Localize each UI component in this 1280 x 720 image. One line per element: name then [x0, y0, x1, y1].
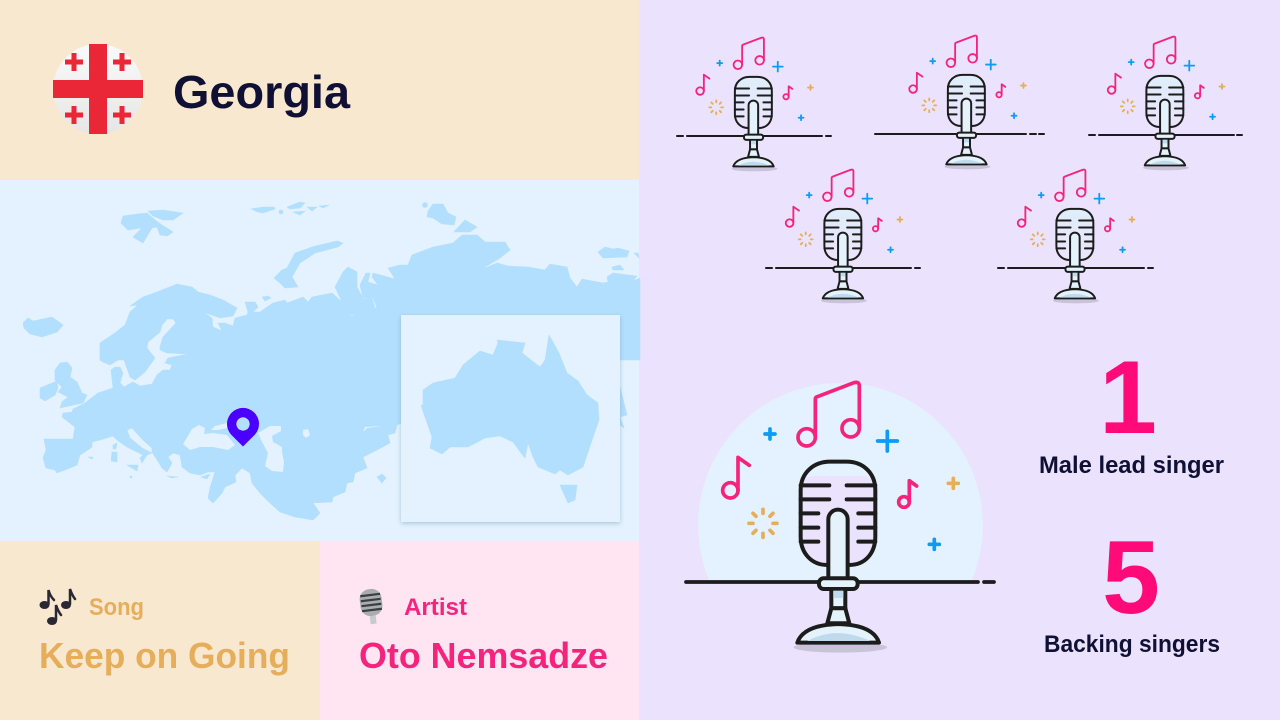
icon: studio microphone [358, 588, 385, 625]
label: male lead singer: Male lead singer [1039, 452, 1224, 479]
text: song title: Keep on Going [39, 635, 290, 676]
panel: artist [320, 541, 639, 720]
icon: backing singer microphone 1 [677, 38, 831, 171]
stat: backing singer count [1044, 520, 1220, 658]
panel: song [0, 541, 320, 720]
text: artist name: Oto Nemsadze [359, 635, 608, 676]
panel: country header [0, 0, 639, 180]
icon: Georgia flag [53, 44, 143, 134]
icon: musical notes [40, 589, 75, 625]
label: backing singers: Backing singers [1044, 631, 1220, 658]
map: Australia inset [401, 315, 620, 522]
label: song: Song [89, 594, 144, 621]
icon: backing singer microphone 5 [998, 170, 1153, 303]
stat: lead singer count: 1 [1099, 340, 1157, 456]
heading: country name: Georgia [173, 66, 350, 118]
icon: backing singer microphone 4 [766, 170, 920, 303]
icon: lead singer microphone [686, 382, 994, 653]
stat: lead singer count [1039, 340, 1224, 479]
map: inland seas [183, 423, 382, 472]
icon: backing singer microphone 2 [875, 36, 1044, 169]
label: artist: Artist [404, 594, 467, 621]
stat: backing singer count: 5 [1102, 520, 1160, 636]
icon: location pin [227, 408, 259, 446]
panel: map [0, 180, 640, 541]
icon: backing singer microphone 3 [1089, 37, 1242, 170]
map: Eurasia landmass [23, 202, 640, 520]
